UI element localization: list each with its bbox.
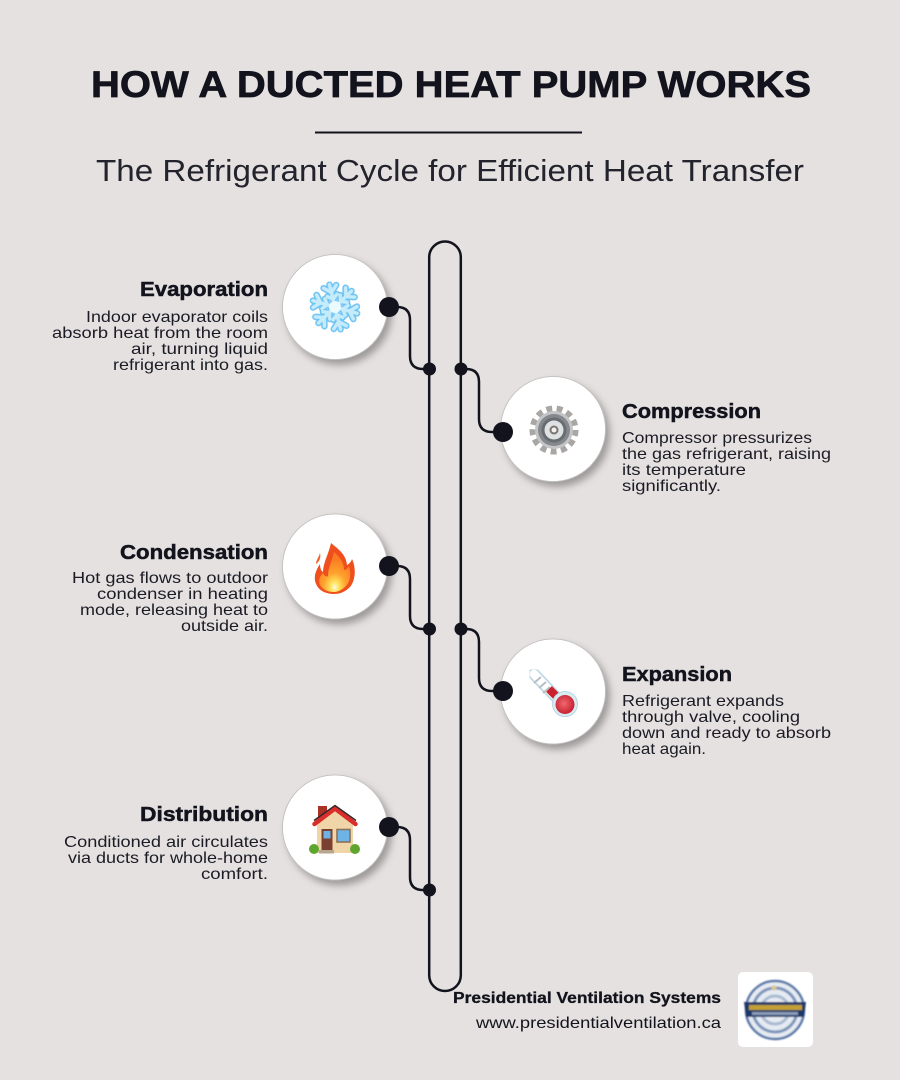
footer: website: www.presidentialventilation.ca (475, 1015, 721, 1032)
subtitle: The Refrigerant Cycle for Efficient Heat Transfer (96, 153, 804, 188)
distribution text: via ducts for whole-home (68, 850, 268, 867)
panel: evaporation (52, 254, 436, 376)
connector dots (454, 622, 513, 701)
title: HOW A DUCTED HEAT PUMP WORKS (91, 64, 811, 105)
icon: house (309, 806, 360, 854)
compression text: its temperature (622, 462, 746, 479)
connector (461, 369, 503, 432)
distribution text (64, 803, 268, 883)
connector dots (454, 362, 513, 442)
distribution text: Conditioned air circulates (64, 834, 268, 851)
compression circle (500, 376, 606, 482)
evaporation text (52, 278, 268, 374)
connector (461, 629, 503, 691)
compression text: Compression (622, 400, 761, 423)
refrigerant loop pipe (429, 242, 461, 991)
connector (389, 307, 429, 369)
distribution text: comfort. (201, 866, 268, 883)
condensation text: Condensation (120, 541, 268, 564)
evaporation text: air, turning liquid (131, 341, 268, 358)
condensation text: outside air. (181, 618, 268, 635)
distribution circle (282, 775, 388, 880)
logo (738, 972, 813, 1047)
connector dots (379, 297, 436, 376)
evaporation text: Indoor evaporator coils (86, 309, 268, 326)
connector dots (379, 556, 436, 636)
compression text: significantly. (622, 478, 721, 495)
evaporation text: absorb heat from the room (52, 325, 268, 342)
condensation text: mode, releasing heat to (80, 602, 268, 619)
condensation text: Hot gas flows to outdoor (72, 570, 269, 587)
distribution text: Distribution (140, 803, 268, 826)
connector (389, 566, 429, 629)
evaporation circle (282, 254, 388, 360)
compression text: Compressor pressurizes (622, 430, 812, 447)
connector (389, 827, 429, 890)
compression text (622, 400, 831, 495)
expansion text (622, 663, 831, 758)
expansion text: through valve, cooling (622, 709, 800, 726)
icon: snowflake (307, 279, 363, 335)
expansion text: Refrigerant expands (622, 693, 784, 710)
footer: company name: Presidential Ventilation Systems (453, 990, 721, 1007)
panel: expansion (454, 622, 831, 758)
evaporation text: refrigerant into gas. (113, 357, 268, 374)
condensation text: condenser in heating (97, 586, 268, 603)
panel: condensation (72, 514, 436, 636)
condensation circle (282, 514, 388, 619)
compression text: the gas refrigerant, raising (622, 446, 831, 463)
expansion circle (500, 639, 606, 744)
condensation text (72, 541, 269, 635)
expansion text: Expansion (622, 663, 732, 686)
connector dots (379, 817, 436, 896)
panel: compression (454, 362, 831, 495)
icon: thermometer (534, 674, 578, 716)
expansion text: heat again. (622, 741, 706, 758)
evaporation text: Evaporation (140, 278, 268, 301)
expansion text: down and ready to absorb (622, 725, 831, 742)
icon: gear (534, 410, 574, 450)
icon: flame (315, 543, 355, 594)
panel: distribution (64, 775, 436, 896)
